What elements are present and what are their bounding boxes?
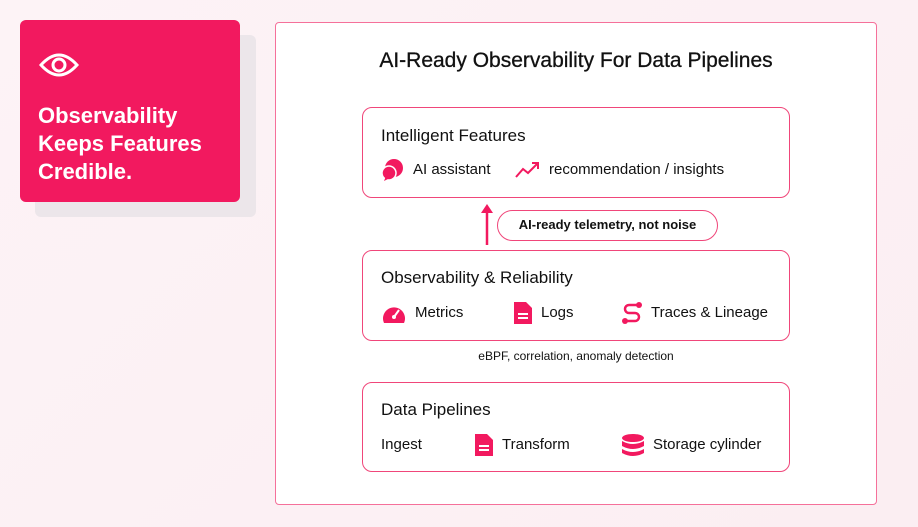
caption: eBPF, correlation, anomaly detection bbox=[478, 349, 674, 363]
hero card bbox=[20, 20, 240, 202]
panel: data pipelines: Data Pipelines bbox=[381, 400, 491, 419]
hero text: Keeps Features bbox=[38, 131, 202, 156]
item: AI assistant bbox=[382, 159, 491, 181]
item: metrics bbox=[383, 304, 463, 323]
panel: intelligent features: Intelligent Features bbox=[381, 126, 526, 145]
item: metrics: Metrics bbox=[415, 304, 463, 321]
item: traces bbox=[622, 302, 768, 324]
item: logs bbox=[514, 302, 574, 324]
item: recommendation: recommendation / insights bbox=[549, 161, 724, 178]
panel: data pipelines bbox=[362, 382, 790, 472]
icon: eye bbox=[39, 54, 79, 76]
hero text bbox=[38, 103, 202, 184]
item: storage bbox=[622, 434, 762, 456]
callout: telemetry bbox=[497, 210, 718, 241]
item: transform: Transform bbox=[502, 436, 570, 453]
card shadow bbox=[35, 35, 256, 217]
panel: intelligent features bbox=[362, 107, 790, 198]
item: transform bbox=[475, 434, 570, 456]
arrow up bbox=[481, 204, 493, 245]
item: storage: Storage cylinder bbox=[653, 436, 761, 453]
panel: observability bbox=[362, 250, 790, 341]
panel: observability: Observability & Reliability bbox=[381, 268, 573, 287]
item: ingest: Ingest bbox=[381, 436, 422, 453]
hero text: Observability bbox=[38, 103, 177, 128]
item: logs: Logs bbox=[541, 304, 574, 321]
main panel bbox=[275, 22, 877, 505]
hero text: Credible. bbox=[38, 159, 132, 184]
item: traces: Traces & Lineage bbox=[651, 304, 768, 321]
item: AI assistant: AI assistant bbox=[413, 161, 491, 178]
callout: telemetry: AI-ready telemetry, not noise bbox=[519, 217, 696, 232]
title: AI-Ready Observability For Data Pipelines bbox=[379, 49, 773, 72]
